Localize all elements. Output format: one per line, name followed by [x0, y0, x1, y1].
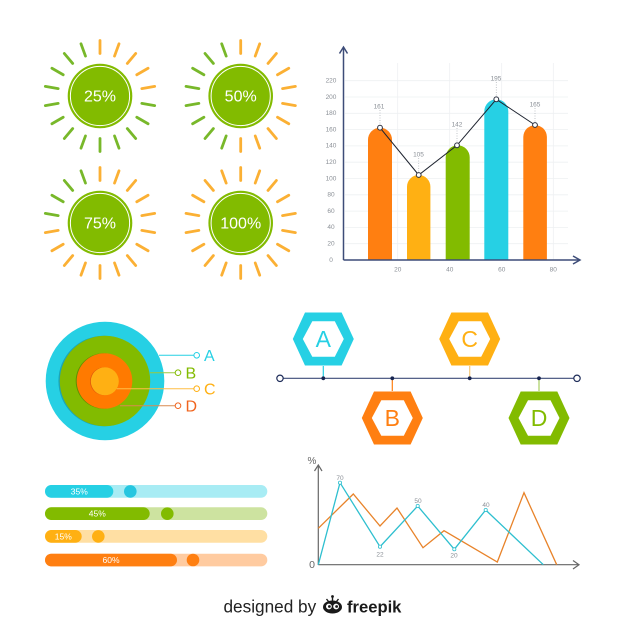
trend line [378, 97, 537, 177]
hexagon B: B [385, 405, 400, 431]
progress bar 15% [45, 530, 267, 543]
point labels: 70 [336, 475, 344, 482]
value labels [374, 76, 541, 172]
sun gauge: 25%: 25% [84, 89, 116, 106]
point labels: 50 [414, 498, 422, 505]
x axis labels: 60 [498, 266, 506, 274]
hexagon A: A [316, 326, 332, 352]
value labels: 142 [452, 122, 463, 128]
footer: designed by freepik: designed by [224, 596, 317, 616]
hexagon A [293, 312, 354, 366]
blue series [318, 481, 543, 565]
y axis labels: 100 [326, 175, 337, 182]
sun gauge: 100%: 100% [220, 216, 261, 233]
hexagon D [508, 392, 570, 444]
bar chart [326, 47, 580, 274]
y axis labels: 140 [326, 143, 337, 150]
line chart axes [314, 465, 579, 569]
footer: designed by freepik [224, 595, 402, 616]
label D [120, 398, 197, 416]
line chart: % [308, 456, 317, 467]
hexagon B [362, 392, 423, 444]
value labels: 105 [413, 152, 424, 158]
y axis labels: 20 [327, 240, 335, 248]
y axis labels: 160 [326, 126, 337, 133]
progress bar 60%: 60% [102, 555, 120, 565]
x axis labels: 80 [550, 266, 557, 274]
sun gauge: 100% [186, 168, 295, 278]
hexagon C: C [461, 326, 478, 352]
concentric target diagram [46, 322, 216, 440]
y axis labels: 80 [327, 192, 335, 199]
label C [117, 382, 216, 398]
label B: B [186, 366, 196, 382]
y axis labels: 60 [327, 208, 335, 215]
y axis labels: 200 [326, 94, 337, 101]
label D: D [186, 398, 197, 416]
x axis labels: 40 [446, 266, 454, 274]
label A: A [204, 348, 215, 365]
progress bar 45% [45, 507, 267, 520]
orange series [318, 493, 557, 565]
point labels: 20 [450, 552, 458, 560]
footer: designed by freepik: freepik [347, 598, 402, 616]
sun gauge: 75% [45, 168, 155, 278]
progress bar 60% [45, 554, 267, 566]
label B [150, 366, 196, 382]
line chart: 0 [309, 559, 315, 571]
y axis labels [326, 78, 337, 264]
axes [340, 47, 580, 264]
hexagon D: D [531, 405, 547, 431]
x axis labels: 20 [394, 266, 402, 274]
timeline [277, 312, 580, 444]
hexagon C [439, 312, 500, 366]
x axis labels [394, 266, 557, 274]
value labels: 165 [530, 102, 541, 108]
y axis labels: 40 [327, 224, 335, 231]
sun gauge: 75%: 75% [84, 216, 116, 233]
sun gauge: 25% [45, 40, 155, 152]
sun gauge: 50% [186, 40, 295, 152]
sun gauge: 50%: 50% [225, 89, 257, 106]
y axis labels: 0 [329, 257, 333, 264]
progress bar 15%: 15% [55, 531, 72, 541]
y axis labels: 180 [326, 110, 337, 117]
label A [159, 348, 215, 365]
progress bar 45%: 45% [89, 509, 106, 519]
value labels: 195 [491, 76, 502, 82]
progress bar 35%: 35% [71, 486, 88, 496]
icon: freepik mascot [323, 595, 342, 614]
line chart [308, 456, 579, 571]
value labels: 161 [374, 104, 385, 110]
y axis labels: 220 [326, 78, 337, 84]
bars [368, 99, 547, 260]
label C: C [204, 382, 216, 398]
progress bar 35% [45, 485, 267, 498]
point labels [336, 475, 490, 560]
y axis labels: 120 [326, 159, 337, 166]
point labels: 40 [482, 502, 490, 509]
point labels: 22 [376, 552, 384, 558]
